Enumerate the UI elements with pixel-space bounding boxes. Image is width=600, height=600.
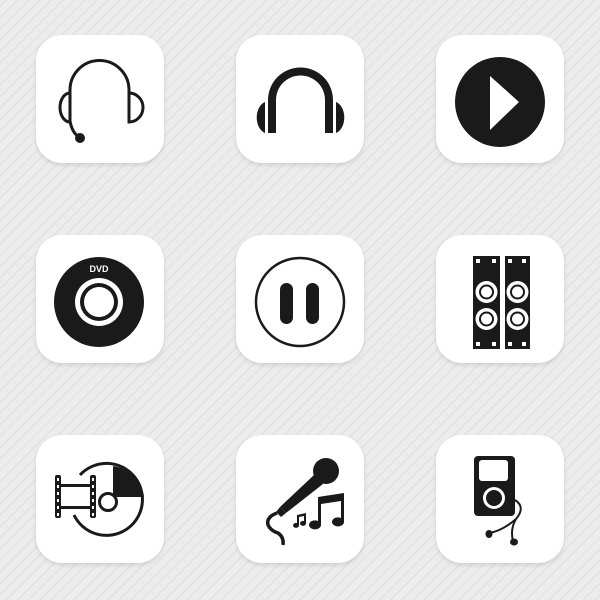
tile: karaoke mic	[236, 435, 364, 563]
icon: pause	[256, 258, 344, 346]
tile: dvd	[36, 235, 164, 363]
tile: play	[436, 35, 564, 163]
tile: pause	[236, 235, 364, 363]
icon: mp3 player	[474, 456, 521, 546]
tile: headphones	[236, 35, 364, 163]
tile: speakers	[436, 235, 564, 363]
tile: film to disc	[36, 435, 164, 563]
tile: headset	[36, 35, 164, 163]
icon: film disc	[55, 463, 144, 535]
icon: speakers	[473, 256, 530, 349]
icon: dvd disc: DVD	[89, 264, 109, 274]
icon: headphones	[257, 68, 344, 133]
tile: music player	[436, 435, 564, 563]
icon: headset	[60, 60, 143, 142]
icon: play button	[455, 57, 545, 147]
icon: microphone with notes	[268, 458, 344, 545]
